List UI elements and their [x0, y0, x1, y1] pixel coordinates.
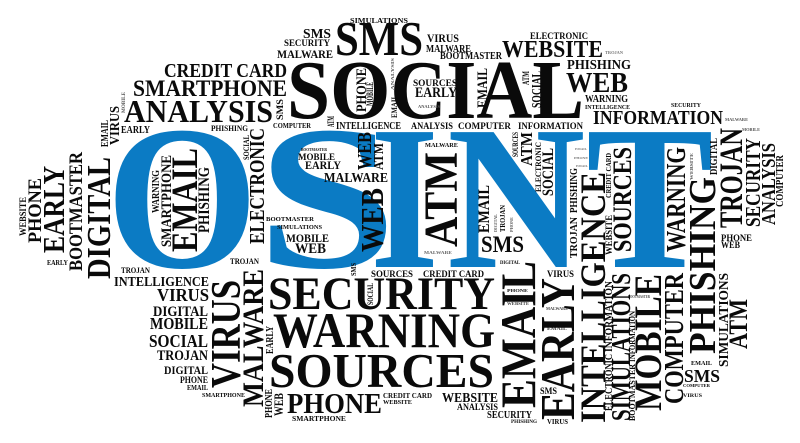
top words group: MALWARE [277, 47, 333, 61]
words inside the letters O, S and I: MALWARE [424, 250, 452, 255]
top words group: BOOTMASTER [440, 51, 503, 62]
left side words group: WEBSITE [18, 197, 28, 236]
bottom centre words group: ANALYSIS [457, 402, 498, 412]
words inside the letters N and T: PHISHING [569, 168, 580, 213]
top words group: ANALYSIS [418, 104, 441, 109]
words inside the letters N and T: ATM [517, 132, 536, 166]
left side words group: EARLY [36, 166, 71, 253]
bottom centre words group: CREDIT CARD [423, 269, 484, 279]
words inside the letters O, S and I: WEB [354, 188, 390, 252]
left side words group: PHONE [25, 178, 46, 243]
words inside the letters O, S and I: WEB [354, 132, 376, 170]
top words group [121, 11, 760, 137]
right side words group: COMPUTER [775, 154, 786, 207]
bottom centre words group: EMAIL [547, 326, 567, 331]
bottom centre words group: SECURITY [487, 410, 533, 421]
top words group: SOCIAL [287, 44, 584, 137]
right side words group: ATM [724, 299, 753, 349]
top words group: EARLY [121, 125, 151, 136]
left side words group: EARLY [264, 326, 276, 354]
bottom centre words group: SMS [540, 386, 557, 396]
top words group: EMAIL [390, 95, 399, 118]
top words group: COMPUTER [273, 122, 312, 130]
left side words group [18, 91, 286, 418]
top words group: PHISHING [567, 58, 631, 73]
bottom centre words group: WARNING [273, 302, 495, 358]
left side words group: EARLY [47, 259, 68, 267]
top words group: WARNING [585, 93, 628, 105]
left side words group: MALWARE [237, 269, 270, 407]
top words group: ANALYSIS [124, 93, 273, 129]
bottom centre words group: MOBILE [627, 274, 670, 411]
top words group: ATM [521, 71, 531, 85]
words inside the letters N and T: TROJAN [569, 216, 580, 258]
bottom centre words group: EARLY [530, 278, 585, 420]
top words group: ANALYSIS [390, 57, 395, 90]
words inside the letters N and T: WEBSITE [689, 153, 694, 180]
words inside the letters N and T: SOURCES [511, 132, 520, 157]
bottom centre words group: ELECTRONIC [603, 354, 615, 411]
bottom centre words group: SECURITY [268, 268, 495, 320]
bottom centre words group: PHISHING [511, 420, 537, 425]
top words group: ANALYSIS [411, 121, 453, 131]
bottom centre words group [268, 172, 689, 426]
right side words group: PHONE [721, 233, 752, 243]
top words group: SMS [335, 11, 423, 66]
bottom centre words group: INFORMATION [628, 311, 637, 362]
title: OSINT in blue: N [447, 85, 585, 313]
words inside the letters O, S and I: TROJAN [230, 257, 259, 266]
right side words group: COMPUTER [683, 383, 710, 388]
left side words group: EMAIL [99, 120, 111, 147]
top words group: COMPUTER [458, 121, 512, 131]
words inside the letters N and T: EMAIL [476, 185, 493, 233]
top words group: EMAIL [475, 68, 491, 108]
words inside the letters N and T: EMAIL [576, 164, 588, 168]
left side words group: VIRUS [204, 280, 250, 388]
left side words group: DIGITAL [164, 363, 208, 377]
words inside the letters O, S and I: BOOTMASTER [301, 147, 327, 152]
bottom centre words group: WEBSITE [507, 301, 529, 306]
words inside the letters O, S and I: SMARTPHONE [159, 155, 175, 247]
words inside the letters N and T: DIGITAL [500, 261, 521, 266]
words inside the letters N and T: PHONE [574, 156, 588, 160]
left side words group: EMAIL [187, 384, 208, 392]
title: OSINT in blue: O [106, 84, 258, 312]
words inside the letters O, S and I: BOOTMASTER [266, 217, 315, 223]
words inside the letters O, S and I: ELECTRONIC [245, 128, 269, 244]
top words group: CREDIT CARD [164, 60, 287, 82]
words inside the letters N and T: PHONE [509, 217, 514, 232]
bottom centre words group: BOOTMASTER [628, 294, 650, 299]
left side words group: PHONE [180, 375, 208, 385]
right side words group: SIMULATIONS [717, 273, 732, 367]
left side words group: VIRUS [157, 285, 209, 305]
bottom centre words group: CREDIT CARD [383, 392, 432, 400]
top words group: EARLY [415, 85, 457, 101]
left side words group: TROJAN [121, 266, 150, 275]
words inside the letters N and T: EMAIL [575, 147, 587, 151]
bottom centre words group: PHONE [507, 288, 528, 293]
bottom centre words group: SMS [350, 263, 358, 276]
top words group: TROJAN [605, 50, 623, 55]
words inside the letters O, S and I: SIMULATIONS [277, 225, 323, 231]
top words group: MOBILE [365, 82, 375, 106]
left side words group: DIGITAL [81, 157, 118, 279]
top words group: WEB [566, 67, 628, 99]
title: OSINT in blue: I [370, 84, 439, 312]
words inside the letters N and T: CREDIT CARD [605, 153, 613, 198]
right side words group: TROJAN [714, 128, 750, 228]
words inside the letters N and T: DIGITAL [493, 214, 498, 232]
words inside the letters N and T: TROJAN [499, 205, 507, 232]
words inside the letters O, S and I [151, 128, 468, 266]
top words group: INTELLIGENCE [336, 121, 401, 132]
title: OSINT in blue: T [586, 85, 714, 313]
bottom centre words group: MALWARE [546, 306, 568, 311]
words inside the letters O, S and I: WARNING [151, 170, 162, 213]
right side words group: SECURITY [741, 138, 765, 227]
words inside the letters N and T: ELECTRONIC [534, 142, 543, 192]
words inside the letters N and T: SOCIAL [540, 148, 557, 196]
top words group: INTELLIGENCE [585, 105, 630, 111]
left side words group: SOCIAL [149, 331, 208, 351]
words inside the letters O, S and I: MOBILE [286, 231, 329, 245]
bottom centre words group: WEBSITE [383, 400, 412, 406]
top words group: PHISHING [211, 124, 248, 133]
top words group: ELECTRONIC [530, 31, 588, 41]
words inside the letters O, S and I: EARLY [305, 158, 341, 172]
bottom centre words group: VIRUS [547, 269, 574, 279]
bottom centre words group: PHONE [287, 388, 382, 420]
right side words group: PHISHING [682, 177, 724, 354]
words inside the letters N and T [476, 132, 694, 266]
bottom centre words group: BOOTMASTER [628, 364, 637, 421]
right side words group: EMAIL [691, 361, 712, 367]
top words group: SOURCES [413, 78, 457, 88]
words inside the letters N and T: SOURCES [608, 147, 637, 252]
bottom centre words group: SOCIAL [366, 283, 375, 305]
left side words group: WEB [271, 393, 286, 416]
title: OSINT in blue: S [257, 83, 397, 312]
left side words group: SMARTPHONE [202, 393, 245, 399]
top words group: INFORMATION [518, 121, 583, 131]
bottom centre words group: VIRUS [547, 418, 568, 426]
top words group: PHONE [354, 68, 370, 112]
words inside the letters N and T: WARNING [661, 147, 691, 252]
title: OSINT in blue [106, 83, 714, 313]
words inside the letters O, S and I: ATM [415, 152, 468, 247]
bottom centre words group: EMAIL [490, 261, 546, 408]
words inside the letters N and T: SMS [481, 232, 524, 257]
left side words group: TROJAN [157, 348, 208, 364]
left side words group: INTELLIGENCE [114, 275, 209, 290]
right side words group [682, 128, 786, 399]
bottom centre words group: INTELLIGENCE [573, 172, 613, 423]
right side words group: WEB [721, 240, 740, 250]
right side words group: SMS [684, 366, 720, 386]
top words group: SMARTPHONE [133, 76, 287, 101]
top words group: ATM [326, 116, 336, 127]
top words group: SOCIAL [530, 71, 545, 108]
right side words group: ANALYSIS [758, 143, 780, 225]
words inside the letters O, S and I: ATM [372, 143, 387, 170]
left side words group: BOOTMASTER [66, 152, 87, 271]
top words group: SECURITY [284, 38, 330, 48]
top words group: MALWARE [426, 43, 471, 55]
top words group: SIMULATIONS [350, 17, 408, 25]
left side words group: MOBILE [122, 91, 127, 113]
top words group: WEBSITE [502, 37, 603, 63]
bottom centre words group: SIMULATIONS [606, 273, 636, 421]
bottom centre words group: SOURCES [371, 269, 413, 279]
top words group: MALWARE [725, 117, 748, 122]
left side words group: VIRUS [108, 106, 123, 145]
bottom centre words group: SOURCES [269, 343, 494, 398]
top words group: SMS [303, 27, 331, 42]
left side words group: PHONE [264, 389, 275, 418]
top words group: VIRUS [427, 31, 459, 45]
words inside the letters O, S and I: EMAIL [165, 148, 206, 252]
right side words group: DIGITAL [708, 138, 720, 175]
words inside the letters O, S and I: WEB [295, 241, 326, 257]
words inside the letters O, S and I: PHISHING [196, 167, 213, 233]
words inside the letters O, S and I: MALWARE [425, 143, 458, 149]
bottom centre words group: SMARTPHONE [292, 415, 346, 423]
left side words group: MOBILE [150, 314, 208, 333]
top words group: MOBILE [742, 127, 760, 132]
bottom centre words group: WEBSITE [442, 391, 498, 406]
top words group: INFORMATION [593, 107, 723, 129]
left side words group: DIGITAL [153, 304, 208, 320]
bottom centre words group: COMPUTER [659, 273, 689, 404]
words inside the letters O, S and I: MALWARE [324, 171, 388, 186]
right side words group: VIRUS [683, 394, 702, 399]
top words group: SECURITY [671, 103, 702, 109]
words inside the letters O, S and I: SOCIAL [242, 135, 251, 160]
words inside the letters O, S and I: MOBILE [298, 152, 335, 162]
words inside the letters N and T: WEBSITE [604, 215, 614, 255]
top words group: SMS [275, 99, 285, 120]
bottom centre words group: INFORMATION [603, 281, 615, 352]
